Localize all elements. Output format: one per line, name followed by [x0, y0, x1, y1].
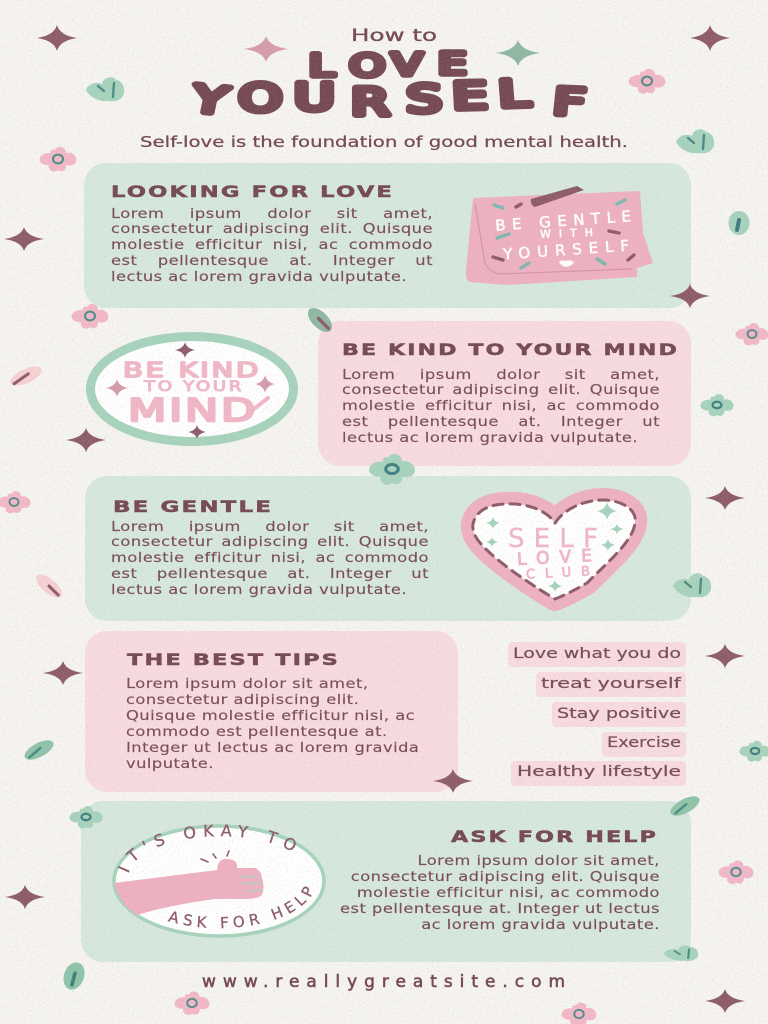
heart badge: self love club — [473, 500, 635, 599]
body text: looking for love — [111, 206, 433, 285]
footer url: www.reallygreatsite.com — [202, 972, 565, 992]
sticky note: be gentle with yourself: BE GENTLE — [495, 207, 632, 235]
body text: be gentle — [111, 520, 429, 598]
heading: be kind to your mind: BE KIND TO YOUR MIND — [342, 340, 679, 359]
body text: be kind to your mind: est pellentesque at. Integer ut — [342, 415, 660, 430]
heart badge: self love club: CLUB — [526, 564, 590, 583]
title: yourself: YOURSELF — [187, 72, 587, 125]
sticky note: be gentle with yourself — [466, 186, 653, 285]
list tags: Exercise — [607, 735, 681, 751]
title: love: LOVE — [309, 47, 466, 84]
body text: ask for help — [340, 854, 660, 933]
body text: the best tips: Quisque molestie efficitur nisi, ac — [126, 709, 415, 724]
subtitle: Self-love is the foundation of good mental health. — [140, 133, 628, 151]
panel: be gentle — [85, 476, 691, 621]
badge: be kind to your mind: MIND — [128, 393, 258, 429]
sticky note: be gentle with yourself: YOURSELF — [502, 237, 630, 263]
body text: the best tips: commodo est pellentesque at. — [126, 725, 388, 740]
list tags: Love what you do — [513, 646, 681, 662]
panel: the best tips — [85, 631, 458, 792]
body text: the best tips — [126, 677, 419, 772]
thumbs up arm — [114, 859, 264, 915]
panel: looking for love — [84, 163, 691, 308]
body text: looking for love: Lorem ipsum dolor sit amet, — [111, 206, 433, 222]
body text: be kind to your mind: molestie efficitur nisi, ac commodo — [342, 399, 660, 414]
body text: the best tips: consectetur adipiscing elit. — [126, 693, 359, 708]
body text: ask for help: consectetur adipiscing elit. Quisque — [351, 870, 660, 885]
body text: be gentle: est pellentesque at. Integer ut — [111, 567, 429, 582]
body text: be gentle: molestie efficitur nisi, ac commodo — [111, 551, 429, 566]
body text: be gentle: Lorem ipsum dolor sit amet, — [111, 520, 429, 534]
badge: be kind to your mind — [90, 336, 294, 442]
body text: the best tips: Lorem ipsum dolor sit amet, — [126, 677, 369, 692]
heading: ask for help: ASK FOR HELP — [451, 827, 658, 846]
heart badge: self love club: LOVE — [517, 546, 593, 570]
title: how to: How to — [351, 26, 437, 46]
badge: be kind to your mind: TO YOUR — [143, 379, 244, 395]
badge: be kind to your mind: BE KIND — [123, 358, 261, 382]
body text: the best tips: vulputate. — [126, 757, 214, 772]
body text: looking for love: consectetur adipiscing elit. Quisque — [111, 222, 433, 237]
body text: ask for help: Lorem ipsum dolor sit amet, — [417, 854, 660, 869]
body text: looking for love: est pellentesque at. Integer ut — [111, 254, 433, 269]
body text: be gentle: lectus ac lorem gravida vulputate. — [111, 583, 407, 598]
heading: be gentle: BE GENTLE — [113, 497, 273, 516]
heading: looking for love: LOOKING FOR LOVE — [111, 182, 394, 201]
badge: it's okay to ask for help — [112, 824, 326, 938]
list tags: Healthy lifestyle — [517, 764, 681, 780]
panel: be kind to your mind — [318, 321, 691, 466]
body text: be kind to your mind: consectetur adipiscing elit. Quisque — [342, 383, 660, 398]
badge: it's okay to ask for help: IT'S OKAY TO — [118, 824, 296, 872]
body text: ask for help: molestie efficitur nisi, ac commodo — [357, 886, 660, 901]
heading: the best tips: THE BEST TIPS — [127, 650, 340, 669]
panel: ask for help — [81, 801, 691, 962]
body text: looking for love: molestie efficitur nisi, ac commodo — [111, 238, 433, 253]
body text: be kind to your mind: lectus ac lorem gravida vulputate. — [342, 431, 638, 446]
body text: ask for help: est pellentesque at. Integer ut lectus — [340, 902, 660, 917]
body text: be kind to your mind — [342, 368, 660, 446]
body text: ask for help: ac lorem gravida vulputate. — [421, 918, 660, 933]
body text: be kind to your mind: Lorem ipsum dolor sit amet, — [342, 368, 660, 382]
list tags — [508, 642, 686, 786]
badge: it's okay to ask for help: ASK FOR HELP — [168, 886, 312, 928]
list tags: treat yourself — [541, 676, 683, 692]
sticky note: be gentle with yourself: WITH — [540, 226, 593, 241]
heart badge: self love club: SELF — [508, 524, 598, 554]
body text: looking for love: lectus ac lorem gravida vulputate. — [111, 270, 407, 285]
body text: be gentle: consectetur adipiscing elit. Quisque — [111, 535, 429, 550]
list tags: Stay positive — [557, 706, 681, 722]
body text: the best tips: Integer ut lectus ac lorem gravida — [126, 741, 419, 756]
